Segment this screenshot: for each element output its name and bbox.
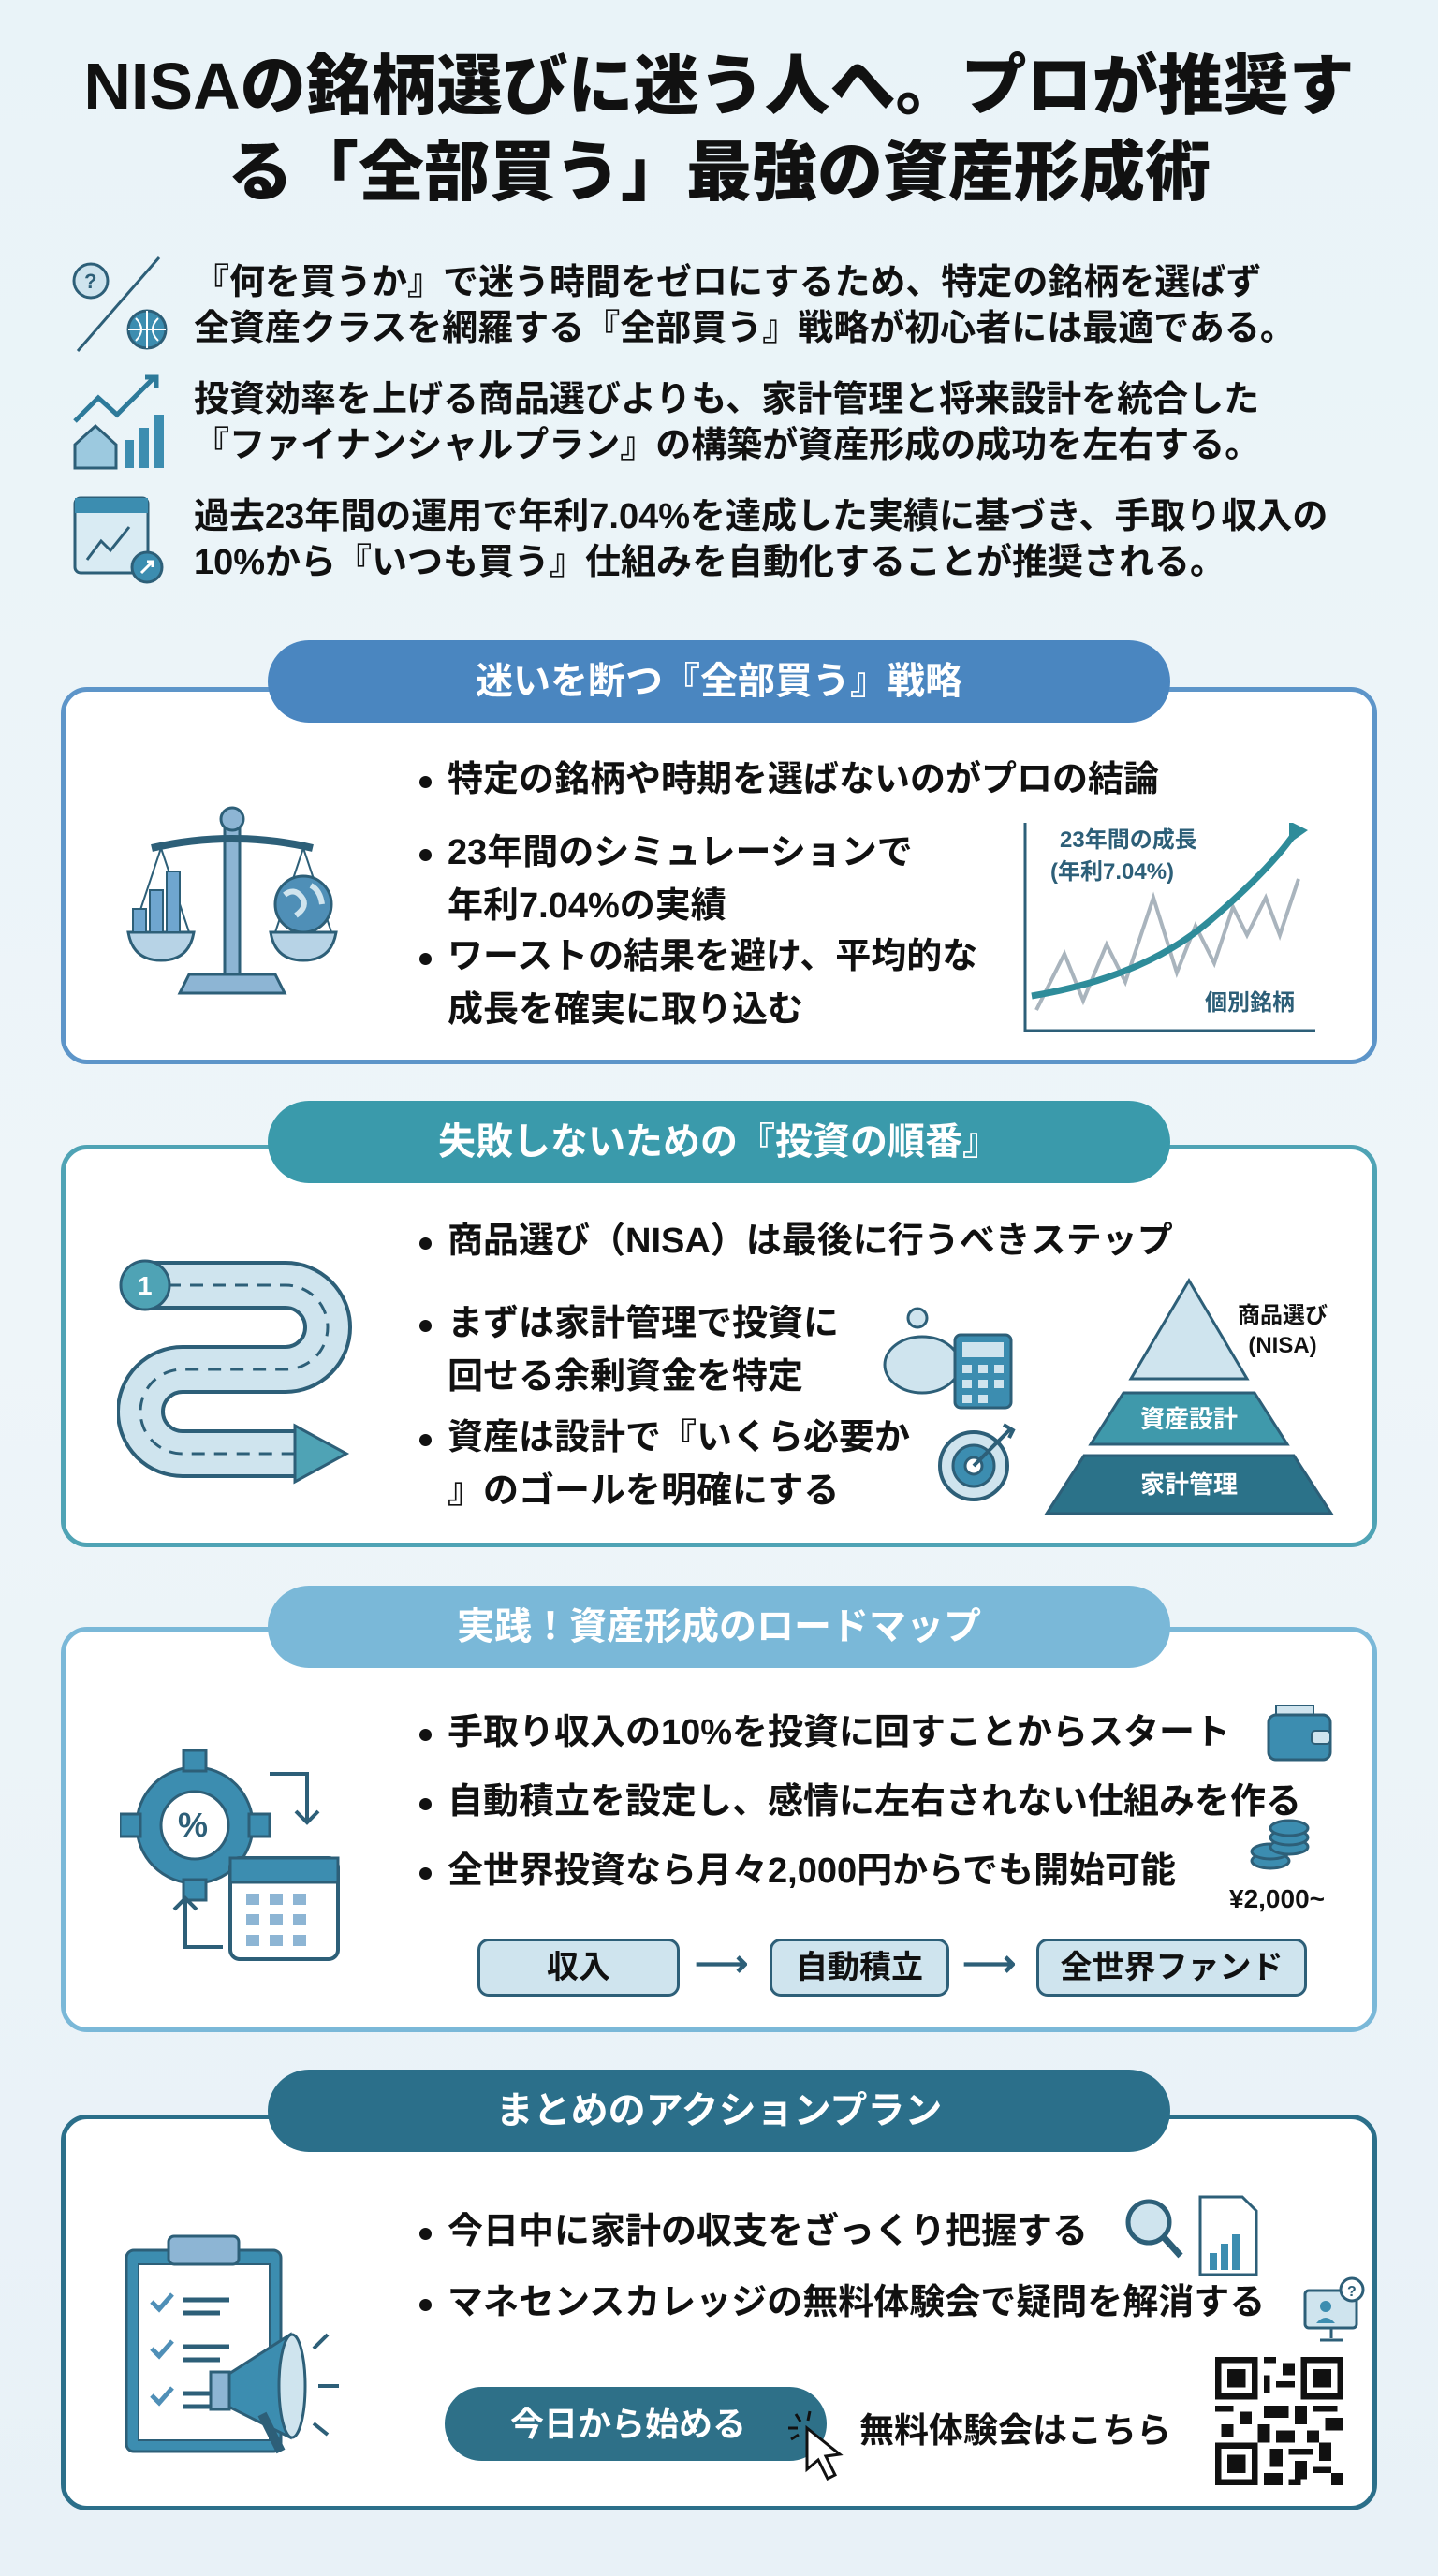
header: panel 4 xyxy=(268,2070,1170,2152)
clipboard and megaphone icon xyxy=(125,2235,339,2454)
bullets: 特定の銘柄や時期を選ばないのがプロの結論 xyxy=(448,760,1159,799)
growth chart xyxy=(1024,823,1315,1032)
button: start today xyxy=(445,2387,827,2461)
scale icon xyxy=(126,807,338,994)
flow box: auto saving: 自動積立 xyxy=(796,1950,923,1985)
text: free trial: 無料体験会はこちら xyxy=(859,2411,1171,2450)
text: 『ファイナンシャルプラン』の構築が資産形成の成功を左右する。 xyxy=(194,426,1260,465)
panel: investment order: まずは家計管理で投資に xyxy=(448,1304,839,1343)
header: panel 2: 失敗しないための『投資の順番』 xyxy=(438,1121,1000,1163)
panel: roadmap xyxy=(61,1627,1377,2032)
growth chart: 個別銘柄 xyxy=(1205,990,1295,1016)
header: panel 4: まとめのアクションプラン xyxy=(496,2090,942,2131)
header: panel 2 xyxy=(268,1101,1170,1183)
intro item 1 xyxy=(73,256,1296,352)
panel: all-buy strategy: 成長を確実に取り込む xyxy=(448,990,803,1030)
pyramid: 資産設計 xyxy=(1140,1405,1238,1433)
flow box: income: 収入 xyxy=(547,1950,610,1985)
text xyxy=(194,497,1328,582)
header: panel 1: 迷いを断つ『全部買う』戦略 xyxy=(476,661,962,702)
arrow: ⟶ xyxy=(962,1943,1016,1984)
coin label: ¥2,000~ xyxy=(1229,1884,1325,1913)
growth chart: 23年間の成長 xyxy=(1060,827,1197,853)
bullets: 商品選び（NISA）は最後に行うべきステップ xyxy=(448,1222,1173,1261)
arrow: ⟶ xyxy=(695,1943,748,1984)
intro item 2 xyxy=(73,374,1260,470)
text xyxy=(194,380,1260,465)
pyramid: 商品選び xyxy=(1238,1303,1328,1328)
panel: action plan: マネセンスカレッジの無料体験会で疑問を解消する xyxy=(448,2283,1265,2322)
icon: monitor question: ? xyxy=(1347,2284,1357,2300)
gear and calendar icon xyxy=(120,1749,340,1961)
icon: magnifier and report xyxy=(1125,2196,1258,2276)
icon: question and globe: ? xyxy=(84,270,96,293)
panel: all-buy strategy: 年利7.04%の実績 xyxy=(448,886,726,926)
bullets: 今日中に家計の収支をざっくり把握する xyxy=(448,2212,1088,2251)
text: 全資産クラスを網羅する『全部買う』戦略が初心者には最適である。 xyxy=(194,309,1296,348)
icon: piggy bank and calculator xyxy=(884,1307,1013,1410)
icon: monitor question xyxy=(1303,2276,1365,2342)
text: 過去23年間の運用で年利7.04%を達成した実績に基づき、手取り収入の xyxy=(194,497,1328,536)
panel: investment order: 』のゴールを明確にする xyxy=(448,1471,839,1511)
panel: all-buy strategy: 23年間のシミュレーションで xyxy=(448,833,913,872)
icon: target xyxy=(938,1423,1016,1501)
title: る「全部買う」最強の資産形成術 xyxy=(227,136,1211,209)
pyramid: (NISA) xyxy=(1248,1333,1317,1358)
road icon: 1 xyxy=(138,1271,153,1300)
panel: investment order xyxy=(61,1145,1377,1547)
title xyxy=(83,50,1355,209)
icon: question and globe xyxy=(73,256,167,352)
text: 10%から『いつも買う』仕組みを自動化することが推奨される。 xyxy=(194,543,1225,582)
panel: roadmap: 全世界投資なら月々2,000円からでも開始可能 xyxy=(448,1852,1176,1891)
icon: house and growth chart xyxy=(73,374,164,470)
bullets: 手取り収入の10%を投資に回すことからスタート xyxy=(448,1713,1230,1752)
intro item 3 xyxy=(73,496,1328,584)
panel: roadmap: 自動積立を設定し、感情に左右されない仕組みを作る xyxy=(448,1782,1301,1822)
header: panel 3: 実践！資産形成のロードマップ xyxy=(457,1606,981,1647)
gear and calendar icon: % xyxy=(178,1806,208,1844)
text: 『何を買うか』で迷う時間をゼロにするため、特定の銘柄を選ばず xyxy=(194,263,1261,302)
panel: investment order: 回せる余剰資金を特定 xyxy=(448,1357,803,1397)
text: 投資効率を上げる商品選びよりも、家計管理と将来設計を統合した xyxy=(194,380,1259,419)
panel: all-buy strategy xyxy=(61,687,1377,1064)
growth chart: (年利7.04%) xyxy=(1050,859,1174,885)
header: panel 1 xyxy=(268,640,1170,723)
QR code xyxy=(1215,2357,1343,2485)
icon: calendar with chart xyxy=(73,496,163,584)
text xyxy=(194,262,1296,348)
flow box: income xyxy=(477,1939,680,1997)
title: NISAの銘柄選びに迷う人へ。プロが推奨す xyxy=(83,50,1355,123)
flow box: global fund: 全世界ファンド xyxy=(1060,1950,1283,1985)
header: panel 3 xyxy=(268,1586,1170,1668)
flow box: global fund xyxy=(1036,1939,1307,1997)
panel: action plan xyxy=(61,2115,1377,2510)
panel: all-buy strategy: ワーストの結果を避け、平均的な xyxy=(448,937,977,976)
panel: investment order: 資産は設計で『いくら必要か xyxy=(448,1418,910,1457)
flow box: auto saving xyxy=(770,1939,949,1997)
flow diagram xyxy=(477,1939,1307,1997)
button: start today: 今日から始める xyxy=(510,2405,746,2443)
icon: coins xyxy=(1251,1820,1309,1870)
pyramid xyxy=(1044,1278,1334,1515)
icon: wallet xyxy=(1268,1705,1331,1762)
pyramid: 家計管理 xyxy=(1140,1471,1238,1499)
icon: cursor xyxy=(788,2411,844,2481)
road icon xyxy=(117,1260,352,1485)
